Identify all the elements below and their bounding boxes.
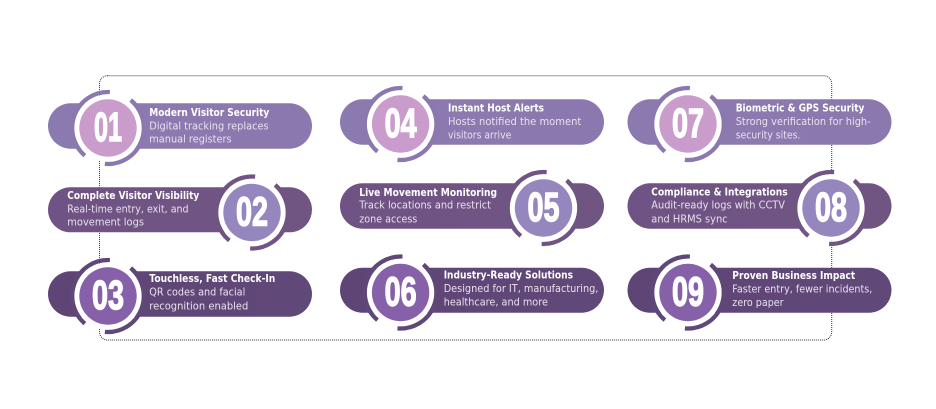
number badge 06 xyxy=(365,257,437,328)
card 03: Touchless, Fast Check-In xyxy=(48,260,312,332)
text: movement logs xyxy=(67,217,144,229)
text: zero paper xyxy=(732,297,784,309)
number badge 01 xyxy=(72,92,144,164)
card 04: Instant Host Alerts xyxy=(340,88,604,160)
text: healthcare, and more xyxy=(444,296,548,308)
text: Digital tracking replaces xyxy=(149,120,269,132)
number badge 07 xyxy=(652,88,724,160)
text xyxy=(732,270,872,309)
number badge 02 xyxy=(216,177,288,248)
text: zone access xyxy=(359,214,417,226)
number badge 08 xyxy=(795,172,867,244)
number badge 07: 07 xyxy=(672,100,704,146)
text: Instant Host Alerts xyxy=(448,103,544,115)
text: recognition enabled xyxy=(149,300,248,312)
number badge 02: 02 xyxy=(236,188,268,234)
pill xyxy=(48,103,312,149)
text: Proven Business Impact xyxy=(732,270,855,282)
text: Hosts notified the moment xyxy=(448,116,581,128)
text: Track locations and restrict xyxy=(358,200,491,212)
text: Strong verification for high- xyxy=(736,116,871,128)
pill xyxy=(48,271,312,317)
pill xyxy=(340,99,604,145)
number badge 06: 06 xyxy=(385,268,417,314)
number badge 04 xyxy=(365,88,437,160)
text xyxy=(149,273,275,312)
text: Designed for IT, manufacturing, xyxy=(444,283,598,295)
text: visitors arrive xyxy=(448,130,511,142)
card 01: Modern Visitor Security xyxy=(48,92,312,164)
text: Modern Visitor Security xyxy=(149,107,269,119)
number badge 05 xyxy=(507,172,580,244)
dotted connector frame xyxy=(100,76,832,340)
number badge 09: 09 xyxy=(672,268,704,314)
number badge 09 xyxy=(652,257,724,328)
number badge 01: 01 xyxy=(94,104,122,150)
text: Touchless, Fast Check-In xyxy=(149,273,275,285)
pill xyxy=(628,183,892,229)
text xyxy=(651,186,788,226)
number badge 03 xyxy=(72,260,144,332)
pill xyxy=(340,268,604,313)
pill xyxy=(628,268,892,313)
text: QR codes and facial xyxy=(149,287,245,299)
number badge 03: 03 xyxy=(92,272,124,318)
card 09: Proven Business Impact xyxy=(628,257,892,328)
text xyxy=(67,190,199,229)
text xyxy=(149,107,269,146)
pill xyxy=(340,183,604,229)
text: Industry-Ready Solutions xyxy=(444,269,573,281)
text xyxy=(448,103,581,142)
text: manual registers xyxy=(149,134,232,146)
text: Faster entry, fewer incidents, xyxy=(732,283,872,295)
number badge 04: 04 xyxy=(385,100,417,146)
text xyxy=(358,187,497,226)
text: Complete Visitor Visibility xyxy=(67,190,199,202)
number badge 08: 08 xyxy=(815,184,847,230)
text: Biometric & GPS Security xyxy=(736,103,865,115)
card 02: Complete Visitor Visibility xyxy=(48,177,312,248)
card 06: Industry-Ready Solutions xyxy=(340,257,604,328)
card 05: Live Movement Monitoring xyxy=(340,172,604,244)
number badge 05: 05 xyxy=(528,184,560,230)
text: Audit-ready logs with CCTV xyxy=(651,199,786,211)
pill xyxy=(628,99,892,145)
text: Real-time entry, exit, and xyxy=(67,204,189,216)
text: Compliance & Integrations xyxy=(651,186,788,198)
pill xyxy=(48,187,312,232)
card 07: Biometric & GPS Security xyxy=(628,88,892,160)
text xyxy=(736,103,871,142)
text: security sites. xyxy=(736,130,800,142)
text xyxy=(444,269,598,308)
text: and HRMS sync xyxy=(651,214,728,226)
text: Live Movement Monitoring xyxy=(359,187,497,199)
card 08: Compliance & Integrations xyxy=(628,172,892,244)
